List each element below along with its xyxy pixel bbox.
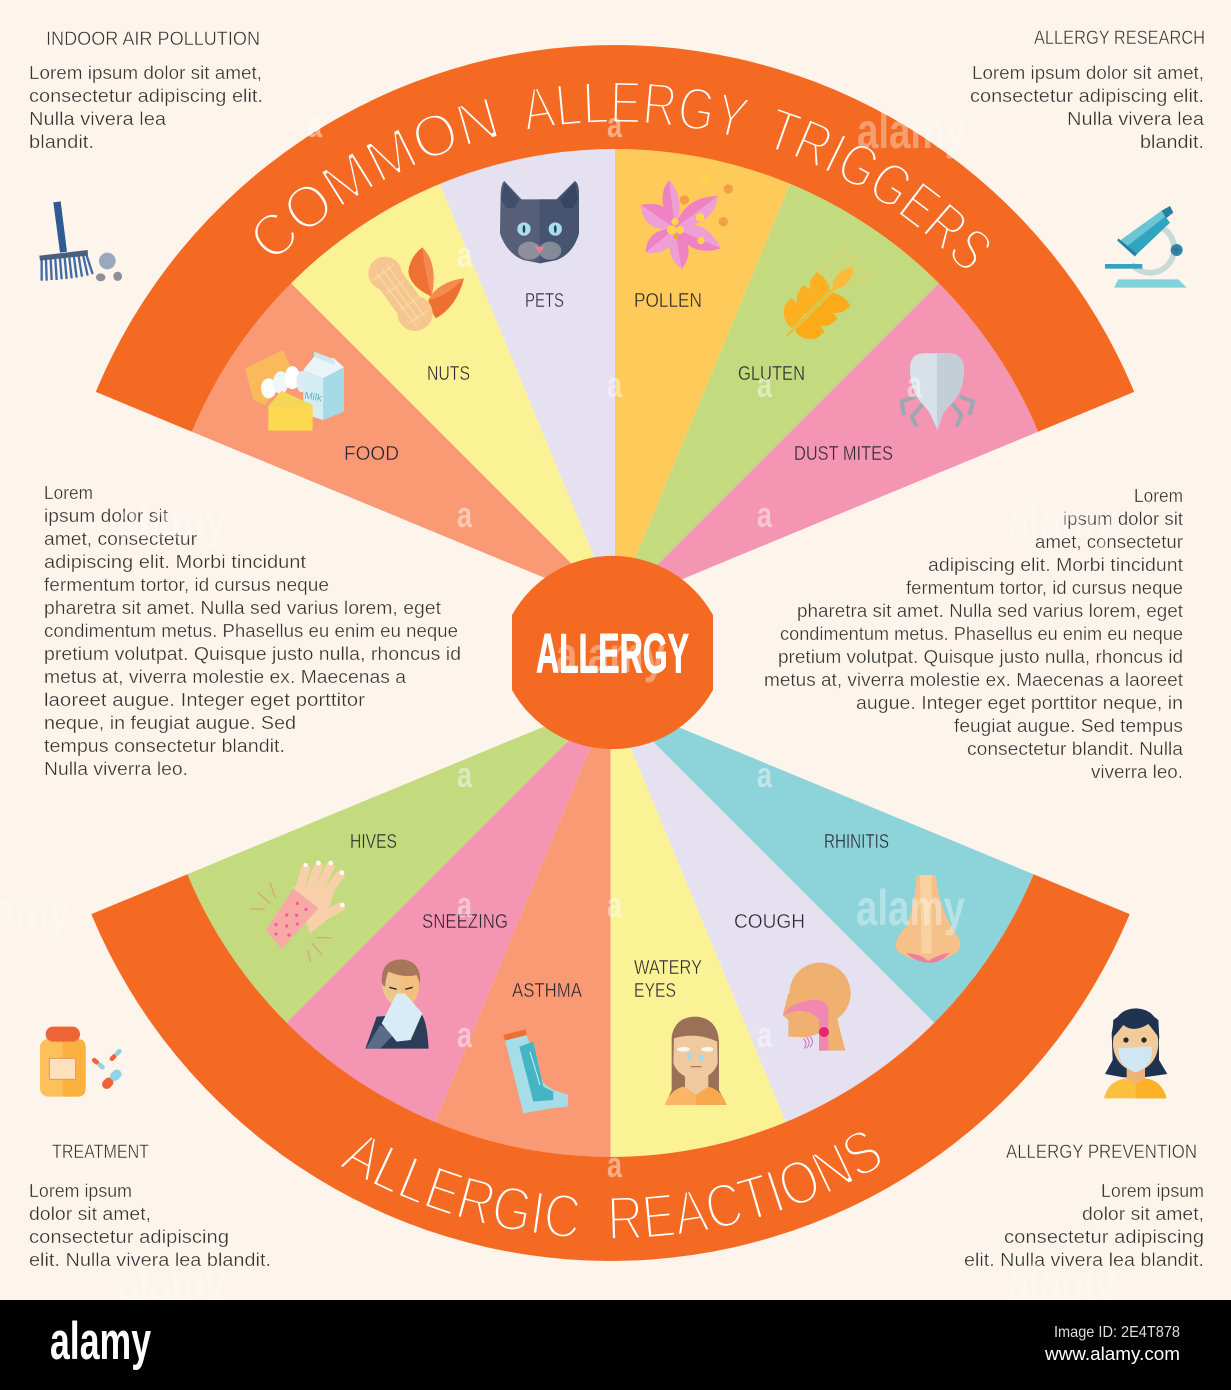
text block: treatment: elit. Nulla vivera lea blandit. bbox=[29, 1250, 271, 1270]
text block: left description: adipiscing elit. Morbi tincidunt bbox=[44, 552, 306, 572]
text block: indoor air pollution: Nulla vivera lea bbox=[29, 109, 167, 129]
watermark overlays: a bbox=[607, 884, 623, 925]
text block: allergy research bbox=[970, 63, 1205, 152]
wedge labels: reactions: EYES bbox=[634, 980, 676, 1002]
text block: left description bbox=[44, 483, 461, 779]
wedge: hives bbox=[187, 699, 610, 1023]
wedge labels: triggers bbox=[344, 290, 893, 465]
icon: sneezing person bbox=[365, 959, 429, 1049]
wedge: pets bbox=[440, 149, 615, 607]
text block: right description: Lorem bbox=[1134, 486, 1183, 506]
watermark overlays: alamy bbox=[1008, 493, 1116, 549]
text block: right description: feugiat augue. Sed tempus bbox=[954, 716, 1183, 736]
watermark overlays: a bbox=[757, 494, 773, 535]
text block: right description: ipsum dolor sit bbox=[1063, 509, 1183, 529]
text block: left description: amet, consectetur bbox=[44, 529, 197, 549]
watermark overlays: a bbox=[307, 104, 323, 145]
text block: right description: metus at, viverra molestie ex. Maecenas a laoreet bbox=[764, 670, 1183, 690]
text block: right description: pretium volutpat. Quisque justo nulla, rhoncus id bbox=[778, 647, 1183, 667]
watermark overlays: alamy bbox=[857, 103, 966, 159]
heading: common allergy triggers: TRIGGERS bbox=[776, 109, 990, 268]
text block: left description: laoreet augue. Integer eget porttitor bbox=[44, 690, 365, 710]
watermark overlays: a bbox=[457, 234, 473, 275]
text block: left description: pretium volutpat. Quisque justo nulla, rhoncus id bbox=[44, 644, 461, 664]
text block: right description: condimentum metus. Phasellus eu enim eu neque bbox=[780, 624, 1183, 644]
text block: left description: Nulla viverra leo. bbox=[44, 759, 188, 779]
text block: treatment: dolor sit amet, bbox=[29, 1204, 151, 1224]
watermark overlays: a bbox=[607, 1144, 623, 1185]
text block: indoor air pollution: consectetur adipiscing elit. bbox=[29, 86, 263, 106]
text block: right description: viverra leo. bbox=[1091, 762, 1183, 782]
icon: hives (hand with rash) bbox=[250, 861, 345, 963]
icon: microscope bbox=[1105, 206, 1187, 288]
watermark overlays bbox=[0, 103, 1116, 1311]
text block: right description: pharetra sit amet. Nulla sed varius lorem, eget bbox=[797, 601, 1183, 621]
wedge: food bbox=[192, 283, 615, 607]
icon: rhinitis nose bbox=[896, 875, 961, 963]
footer url: www.alamy.com bbox=[1044, 1344, 1180, 1364]
icon: food (eggs, cheese, milk): Milk bbox=[303, 390, 323, 404]
text block: allergy research: Lorem ipsum dolor sit amet, bbox=[972, 63, 1204, 83]
footer bar bbox=[0, 1300, 1231, 1390]
footer logo: alamy: alamy bbox=[50, 1312, 151, 1371]
text block: indoor air pollution: Lorem ipsum dolor sit amet, bbox=[29, 63, 262, 83]
icon: pets (cat) bbox=[500, 181, 579, 263]
text block: indoor air pollution: blandit. bbox=[29, 132, 94, 152]
text block: treatment bbox=[29, 1181, 271, 1270]
footer image id: Image ID: 2E4T878 bbox=[1054, 1324, 1180, 1341]
icon: food (eggs, cheese, milk) bbox=[245, 350, 344, 431]
watermark overlays: a bbox=[457, 754, 473, 795]
icon: pollen flower bbox=[641, 175, 733, 269]
panel: common allergy triggers fan bbox=[96, 45, 1134, 607]
wedge labels: triggers: NUTS bbox=[427, 363, 470, 385]
heading: allergic reactions: REACTIONS bbox=[612, 1132, 880, 1238]
text block: treatment: Lorem ipsum bbox=[29, 1181, 132, 1201]
text block: indoor air pollution bbox=[29, 63, 263, 152]
icon: nuts (peanut and almonds) bbox=[368, 247, 464, 331]
wedge labels: triggers: DUST MITES bbox=[794, 443, 893, 465]
wedge labels: reactions: COUGH bbox=[734, 911, 805, 933]
wedge labels: reactions: SNEEZING bbox=[422, 911, 508, 933]
wedge labels: reactions: ASTHMA bbox=[512, 980, 583, 1002]
watermark overlays: alamy bbox=[556, 627, 665, 683]
wedge: asthma bbox=[435, 699, 610, 1157]
heading: common allergy triggers bbox=[255, 83, 990, 268]
wedge labels: triggers: FOOD bbox=[344, 443, 399, 465]
icon: broom bbox=[39, 201, 122, 281]
ring band: bottom bbox=[91, 874, 1130, 1261]
text block: allergy research: blandit. bbox=[1140, 132, 1204, 152]
heading: allergy research: ALLERGY RESEARCH bbox=[1034, 28, 1205, 49]
heading: common allergy triggers: COMMON bbox=[255, 99, 497, 254]
text block: left description: metus at, viverra molestie ex. Maecenas a bbox=[44, 667, 407, 687]
icon: woman with mask bbox=[1104, 1008, 1167, 1098]
wedge: watery eyes bbox=[610, 699, 786, 1157]
heading: treatment: TREATMENT bbox=[52, 1142, 149, 1163]
wedge labels: reactions: RHINITIS bbox=[824, 831, 889, 853]
text block: left description: condimentum metus. Phasellus eu enim eu neque bbox=[44, 621, 458, 641]
text block: right description: augue. Integer eget porttitor neque, in bbox=[856, 693, 1183, 713]
watermark overlays: alamy bbox=[856, 880, 965, 936]
wedge labels: reactions: HIVES bbox=[350, 831, 397, 853]
wedge labels: reactions bbox=[350, 831, 889, 1002]
watermark overlays: a bbox=[457, 884, 473, 925]
wedge labels: triggers: GLUTEN bbox=[738, 363, 805, 385]
wedge labels: reactions: WATERY bbox=[634, 957, 702, 979]
text block: allergy prevention bbox=[964, 1181, 1204, 1270]
text block: left description: neque, in feugiat augue. Sed bbox=[44, 713, 296, 733]
icon: watery eyes woman bbox=[665, 1017, 727, 1105]
text block: allergy prevention: dolor sit amet, bbox=[1082, 1204, 1204, 1224]
heading: allergic reactions: ALLERGIC bbox=[340, 1137, 578, 1236]
icon: treatment pills bbox=[40, 1027, 123, 1097]
wedge: rhinitis bbox=[610, 699, 1034, 1023]
wedge: nuts bbox=[291, 184, 615, 607]
watermark overlays: a bbox=[757, 1014, 773, 1055]
text block: left description: ipsum dolor sit bbox=[44, 506, 168, 526]
text block: right description bbox=[764, 486, 1184, 782]
wedge: gluten bbox=[615, 184, 939, 607]
icon: cough head profile bbox=[783, 963, 851, 1051]
text block: right description: adipiscing elit. Morbi tincidunt bbox=[928, 555, 1183, 575]
watermark overlays: a bbox=[757, 364, 773, 405]
watermark overlays: alamy bbox=[118, 1255, 226, 1311]
watermark overlays: alamy bbox=[118, 493, 226, 549]
panel: allergic reactions fan bbox=[91, 699, 1130, 1261]
watermark overlays: alamy bbox=[1008, 1255, 1116, 1311]
text block: right description: amet, consectetur bbox=[1035, 532, 1183, 552]
text block: treatment: consectetur adipiscing bbox=[29, 1227, 229, 1247]
center badge: allergy bbox=[512, 556, 713, 749]
wedge labels: triggers: POLLEN bbox=[634, 290, 702, 312]
wedge: sneezing bbox=[287, 699, 610, 1122]
text block: left description: Lorem bbox=[44, 483, 93, 503]
text block: allergy prevention: Lorem ipsum bbox=[1101, 1181, 1204, 1201]
text block: left description: tempus consectetur blandit. bbox=[44, 736, 285, 756]
watermark overlays: a bbox=[757, 754, 773, 795]
text block: allergy prevention: consectetur adipiscing bbox=[1004, 1227, 1204, 1247]
watermark overlays: a bbox=[607, 364, 623, 405]
watermark overlays: a bbox=[907, 364, 923, 405]
wedge: pollen bbox=[615, 149, 790, 607]
center badge: allergy: ALLERGY bbox=[536, 622, 689, 684]
ring band: top bbox=[96, 45, 1134, 432]
text block: allergy research: consectetur adipiscing elit. bbox=[970, 86, 1204, 106]
icon: dust mite bbox=[902, 353, 973, 431]
heading: indoor air pollution: INDOOR AIR POLLUTION bbox=[46, 29, 260, 50]
watermark overlays: a bbox=[457, 494, 473, 535]
wedge: dust mites bbox=[615, 283, 1038, 607]
text block: allergy research: Nulla vivera lea bbox=[1067, 109, 1205, 129]
icon: asthma inhaler bbox=[503, 1029, 568, 1113]
heading: common allergy triggers: ALLERGY bbox=[528, 83, 748, 135]
text block: right description: consectetur blandit. Nulla bbox=[967, 739, 1184, 759]
text block: allergy prevention: elit. Nulla vivera lea blandit. bbox=[964, 1250, 1204, 1270]
wedge: cough bbox=[610, 699, 934, 1122]
wedge labels: triggers: PETS bbox=[525, 290, 564, 312]
watermark overlays: a bbox=[607, 104, 623, 145]
text block: left description: pharetra sit amet. Nulla sed varius lorem, eget bbox=[44, 598, 441, 618]
text block: left description: fermentum tortor, id cursus neque bbox=[44, 575, 329, 595]
text block: right description: fermentum tortor, id cursus neque bbox=[906, 578, 1183, 598]
heading: allergy prevention: ALLERGY PREVENTION bbox=[1006, 1142, 1197, 1163]
icon: gluten (wheat) bbox=[769, 247, 873, 353]
heading: allergic reactions bbox=[340, 1132, 880, 1238]
watermark overlays: a bbox=[457, 1014, 473, 1055]
